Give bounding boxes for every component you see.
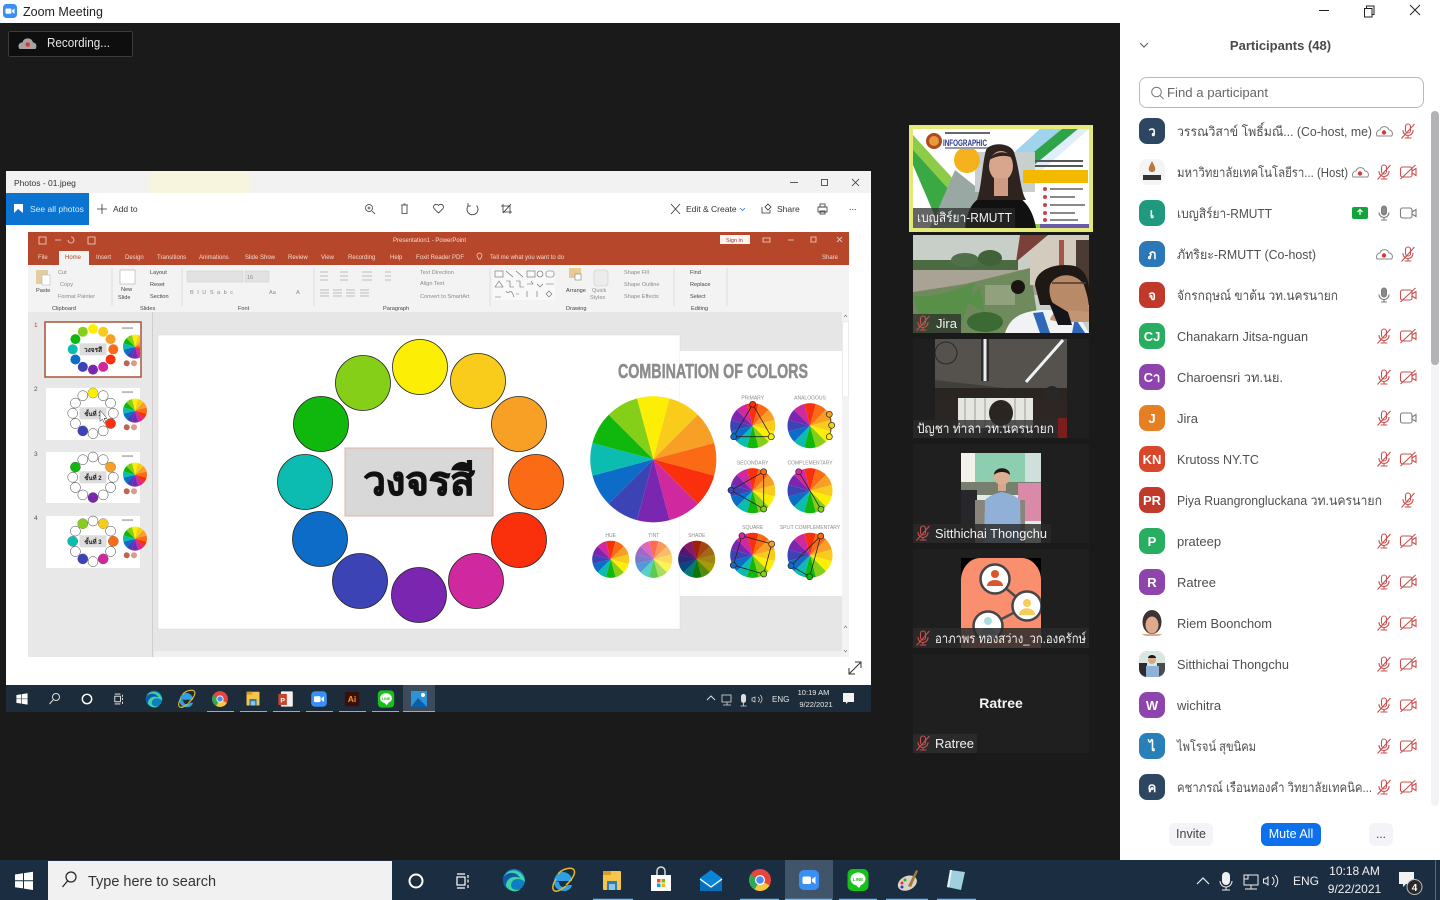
powerpoint ribbon: Copy [60, 282, 73, 288]
photos toolbar: ... [849, 202, 857, 212]
small wheel: analogous: ANALOGOUS [794, 396, 826, 402]
thumbnail 4: ขั้นที่ 3 [84, 536, 102, 546]
participant row 14 [1139, 651, 1416, 677]
participant row 11: prateep [1177, 534, 1221, 549]
video tile: ปัญชา ท่าลา วท.นครนายก [913, 339, 1067, 438]
powerpoint ribbon: Cut [58, 270, 67, 276]
thumbnail 2 [46, 388, 147, 440]
participant row 10: PR [1143, 493, 1162, 508]
small wheel: analogous [787, 396, 835, 448]
powerpoint title and tabs: Design [125, 255, 144, 261]
powerpoint ribbon: Styles [590, 295, 605, 301]
video tile: ปัญชา ท่าลา วท.นครนายก: ปัญชา ท่าลา วท.นครนายก [917, 421, 1054, 436]
system tray: 10:18 AM [1329, 864, 1380, 878]
small wheel: shade: SHADE [688, 533, 706, 539]
window controls [1319, 5, 1420, 17]
participant row 3 [1139, 200, 1416, 226]
participant row 16: ไพโรจน์ สุขนิคม [1176, 739, 1256, 755]
participants heading [1140, 38, 1331, 53]
photos toolbar: Edit & Create [686, 204, 737, 214]
powerpoint ribbon: Shape Outline [624, 282, 659, 288]
search box: Find a participant [1167, 85, 1268, 100]
small wheel: split complementary: SPLIT COMPLEMENTARY [780, 525, 841, 531]
video tile: อาภาพร ทองสว่าง_วก.องครักษ์: อาภาพร ทองสว่าง_วก.องครักษ์ [935, 631, 1086, 646]
participant row 2: มหาวิทยาลัยเทคโนโลยีรา... (Host) [1177, 165, 1348, 180]
powerpoint title and tabs: Home [65, 255, 82, 261]
participant row 16: ไ [1147, 738, 1156, 754]
recording indicator: Recording... [47, 36, 110, 50]
system tray: ENG [1293, 874, 1319, 888]
color ring circles [278, 340, 564, 622]
small wheel: secondary [728, 460, 775, 513]
participant row 8 [1139, 405, 1416, 431]
powerpoint title and tabs: View [321, 255, 335, 261]
main windows taskbar [0, 860, 1440, 900]
powerpoint ribbon: Convert to SmartArt [420, 294, 470, 300]
participant row 15: wichitra [1176, 698, 1222, 713]
expand arrow [849, 662, 861, 674]
powerpoint ribbon: Arrange [566, 288, 586, 294]
small wheel: tint: TINT [648, 533, 659, 539]
small wheel: complementary [787, 460, 833, 513]
small wheel: square [730, 525, 775, 578]
system tray [1197, 860, 1436, 900]
slide thumbnail panel: 4 [34, 515, 38, 522]
powerpoint title and tabs: Foxit Reader PDF [416, 255, 464, 261]
powerpoint ribbon: Slide [118, 295, 130, 301]
participant row 15: W [1146, 698, 1159, 713]
photos toolbar [6, 193, 857, 225]
powerpoint title and tabs: Help [390, 255, 403, 261]
participant row 9: Krutoss NY.TC [1177, 452, 1259, 467]
small wheel: shade [678, 533, 715, 578]
slide canvas [158, 335, 842, 629]
system tray: 4 [1412, 883, 1418, 894]
taskbar app icons [410, 860, 976, 900]
participant row 6: CJ [1144, 329, 1160, 344]
powerpoint ribbon: 16 [247, 275, 253, 281]
participant row 7 [1139, 364, 1416, 390]
participant row 12: R [1147, 575, 1157, 590]
participant row 5: จักรกฤษณ์ ขาต้น วท.นครนายก [1177, 288, 1338, 303]
thumbnail 3: ขั้นที่ 2 [84, 472, 102, 482]
participant row 11: P [1148, 534, 1157, 549]
participant row 6: Chanakarn Jitsa-nguan [1177, 329, 1308, 344]
participant row 1: วรรณวิสาข์ โพธิ์มณี... (Co-host, me) [1177, 122, 1372, 139]
powerpoint ribbon: Aa [269, 290, 277, 296]
participant row 13 [1139, 610, 1416, 636]
video tile: Sitthichai Thongchu: Sitthichai Thongchu [935, 526, 1047, 541]
participant row 4: ภัทริยะ-RMUTT (Co-host) [1177, 247, 1316, 262]
powerpoint ribbon: Format Painter [58, 294, 95, 300]
inner windows taskbar: 9/22/2021 [799, 700, 833, 709]
powerpoint ribbon: Shape Effects [624, 294, 659, 300]
participant row 12 [1139, 569, 1416, 595]
participant row 9 [1139, 446, 1416, 472]
powerpoint ribbon: Text Direction [420, 270, 454, 276]
small wheel: split complementary [780, 525, 841, 580]
video tile: Ratree: Ratree [935, 736, 974, 751]
participant row 4 [1139, 241, 1414, 267]
inner windows taskbar: ENG [772, 695, 789, 704]
powerpoint title and tabs: File [38, 255, 48, 261]
small wheel: secondary: SECONDARY [737, 460, 769, 466]
powerpoint ribbon: Paragraph [383, 306, 409, 312]
video tile: Jira: Jira [936, 316, 958, 331]
thumbnail 4 [46, 516, 147, 568]
search box [1140, 78, 1424, 108]
participants heading: Participants (48) [1230, 38, 1331, 53]
powerpoint ribbon: New [121, 287, 133, 293]
participant row 8: J [1148, 411, 1156, 426]
thumbnail 2: ขั้นที่ 1 [84, 408, 102, 418]
inner windows taskbar: 10:19 AM [798, 688, 829, 697]
participant row 14: Sitthichai Thongchu [1177, 657, 1289, 672]
participant row 2 [1139, 159, 1416, 185]
participant row 15 [1139, 692, 1416, 718]
recording indicator [8, 32, 132, 56]
participant scrollbar [1431, 111, 1439, 806]
participant row 7: Charoensri วท.นย. [1177, 370, 1283, 385]
small wheel: complementary: COMPLEMENTARY [787, 460, 833, 466]
center label: วงจรสี: วงจรสี [363, 460, 475, 504]
powerpoint ribbon: Font [238, 306, 250, 312]
powerpoint ribbon: A [296, 290, 300, 296]
search bar [48, 861, 392, 900]
inner windows taskbar [6, 685, 871, 712]
participant row 3: เบญสิร์ยา-RMUTT [1177, 206, 1272, 221]
powerpoint title and tabs: Sign in [726, 238, 743, 244]
powerpoint title and tabs [28, 232, 849, 265]
powerpoint ribbon: BIUSabc [190, 290, 237, 296]
powerpoint ribbon: Quick [592, 288, 607, 294]
powerpoint title and tabs: Insert [96, 255, 111, 261]
participant row 1 [1139, 118, 1414, 144]
powerpoint ribbon: Shape Fill [624, 270, 649, 276]
video tile: Ratree: Ratree [979, 695, 1023, 711]
mute all button: Mute All [1269, 827, 1313, 841]
participant row 12: Ratree [1177, 575, 1216, 590]
powerpoint scrollbars [154, 312, 849, 657]
powerpoint ribbon: Find [690, 270, 701, 276]
more button: ... [1376, 827, 1386, 841]
video tile: Jira [913, 235, 1089, 333]
participant row 10: Piya Ruangrongluckana วท.นครนายก [1177, 493, 1382, 508]
photos title bar: Photos - 01.jpeg [14, 178, 76, 188]
powerpoint title and tabs: Review [288, 255, 308, 261]
powerpoint window [28, 232, 849, 657]
powerpoint ribbon: Paste [36, 288, 50, 294]
photos toolbar: Add to [113, 204, 138, 214]
powerpoint title and tabs: Share [822, 255, 839, 261]
shared screen: Photos window [6, 171, 871, 712]
participant row 13: Riem Boonchom [1177, 616, 1272, 631]
video tile: เบญสิร์ยา-RMUTT (active speaker) [909, 125, 1093, 232]
small wheel: primary [730, 396, 775, 448]
small wheel: primary: PRIMARY [741, 396, 765, 402]
powerpoint ribbon [28, 265, 849, 312]
small wheel: tint [635, 533, 672, 578]
meeting background [0, 0, 1120, 860]
center label: วงจรสี [345, 448, 493, 516]
powerpoint title and tabs: Transitions [157, 255, 186, 261]
invite button [1169, 823, 1213, 846]
powerpoint title and tabs: Recording [348, 255, 375, 261]
heading: combination of colors: COMBINATION OF COLORS [618, 361, 808, 383]
title bar: Zoom Meeting [0, 0, 1120, 23]
small wheel: hue [592, 533, 629, 578]
small wheel: square: SQUARE [742, 525, 764, 531]
participant row 5: จ [1148, 288, 1156, 303]
participant row 7: Cา [1144, 370, 1160, 385]
title bar: Zoom Meeting: Zoom Meeting [23, 5, 103, 19]
main color wheel [590, 396, 716, 522]
participant row 4: ภ [1148, 247, 1156, 262]
video tile: Sitthichai Thongchu [913, 453, 1051, 543]
search bar: Type here to search [88, 873, 216, 890]
powerpoint title and tabs: Slide Show [245, 255, 276, 261]
powerpoint title and tabs: Presentation1 - PowerPoint [393, 238, 466, 244]
photos toolbar: See all photos [30, 204, 84, 214]
powerpoint title and tabs: Tell me what you want to do [490, 255, 565, 261]
powerpoint ribbon: Editing [691, 306, 708, 312]
video tile: Ratree [913, 654, 1089, 753]
powerpoint ribbon: Replace [690, 282, 711, 288]
video tile: เบญสิร์ยา-RMUTT (active speaker): INFOGRAPHIC [943, 138, 987, 149]
participant row 9: KN [1143, 452, 1161, 467]
powerpoint ribbon: Reset [150, 282, 165, 288]
slide thumbnail panel [28, 312, 152, 657]
mute all button [1261, 823, 1321, 846]
slide thumbnail panel: 1 [34, 322, 38, 329]
participant row 11 [1139, 528, 1416, 554]
powerpoint ribbon: Section [150, 294, 169, 300]
start button [15, 872, 33, 890]
participant row 16 [1139, 733, 1416, 759]
participant row 1: ว [1148, 124, 1156, 139]
participant row 17 [1139, 774, 1416, 800]
system tray: 9/22/2021 [1328, 882, 1382, 896]
slide thumbnail panel: 2 [34, 386, 38, 393]
powerpoint ribbon: Select [690, 294, 706, 300]
thumbnail 3 [46, 452, 147, 503]
participant row 17: คชาภรณ์ เรือนทองคำ วิทยาลัยเทคนิค... [1177, 780, 1372, 795]
powerpoint ribbon: Slides [140, 306, 155, 312]
video tile: เบญสิร์ยา-RMUTT (active speaker): เบญสิร์ยา-RMUTT [917, 210, 1012, 225]
powerpoint title and tabs: Animations [199, 255, 229, 261]
thumbnail 1: วงจรสี [84, 346, 102, 354]
thumbnail 1 [45, 322, 147, 377]
participant row 6 [1139, 323, 1416, 349]
participant row 5 [1139, 282, 1416, 308]
powerpoint ribbon: Drawing [566, 306, 587, 312]
more button [1369, 823, 1393, 846]
invite button: Invite [1176, 827, 1206, 841]
photos title bar [6, 171, 871, 193]
photos toolbar: Share [777, 204, 800, 214]
small wheel: hue: HUE [605, 533, 617, 539]
powerpoint ribbon: Layout [150, 270, 167, 276]
slide thumbnail panel: 3 [34, 451, 38, 458]
participant row 8: Jira [1177, 411, 1199, 426]
panel: participants [1120, 0, 1440, 860]
powerpoint ribbon: Align Text [420, 281, 445, 287]
participant row 10 [1139, 487, 1414, 513]
video tile: อาภาพร ทองสว่าง_วก.องครักษ์ [913, 549, 1089, 648]
participant row 17: ค [1148, 780, 1156, 795]
powerpoint ribbon: Clipboard [52, 306, 76, 312]
participant row 3: เ [1150, 206, 1154, 221]
